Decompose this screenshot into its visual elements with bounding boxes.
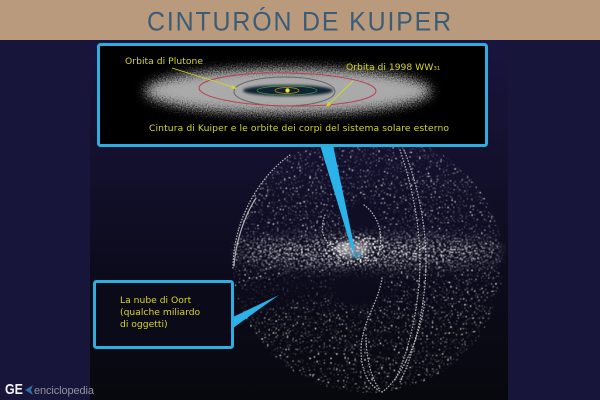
dotted rings bbox=[233, 150, 426, 392]
bright core bbox=[335, 241, 369, 257]
galactic band dots bbox=[230, 226, 506, 278]
logo: enciclopedia bbox=[34, 385, 95, 397]
pointer to Kuiper belt bbox=[320, 145, 362, 258]
label: 1998 WW31 orbit: Orbita di 1998 WW31 bbox=[346, 62, 440, 73]
callout text: (qualche miliardo bbox=[120, 307, 201, 318]
callout text: La nube di Oort bbox=[120, 295, 191, 306]
pointer to Oort cloud bbox=[233, 295, 279, 328]
Neptune orbit bbox=[234, 77, 335, 106]
arrow to 1998 WW31 orbit bbox=[326, 81, 353, 107]
panel: Kuiper belt diagram bbox=[98, 44, 486, 146]
Oort cloud sphere bbox=[230, 130, 506, 395]
logo bbox=[5, 381, 95, 398]
title banner bbox=[0, 0, 600, 40]
arrow to Pluto orbit bbox=[172, 68, 237, 89]
1998 WW31 orbit bbox=[199, 71, 376, 108]
central image backdrop bbox=[90, 40, 508, 400]
inner orbits bbox=[257, 86, 317, 95]
icon: logo mark bbox=[25, 385, 33, 395]
callout text: di oggetti) bbox=[120, 319, 168, 330]
sparse sphere dots bbox=[230, 130, 506, 395]
belt disc bbox=[145, 68, 431, 114]
caption: Cintura di Kuiper e le orbite dei corpi del sistema solare esterno bbox=[149, 123, 449, 134]
inner dark disc bbox=[243, 85, 333, 96]
sun bbox=[285, 88, 290, 93]
title banner: CINTURÓN DE KUIPER bbox=[147, 6, 453, 36]
panel: Oort cloud callout bbox=[94, 282, 232, 348]
label: Pluto orbit: Orbita di Plutone bbox=[125, 56, 203, 67]
logo: GE bbox=[5, 381, 23, 398]
